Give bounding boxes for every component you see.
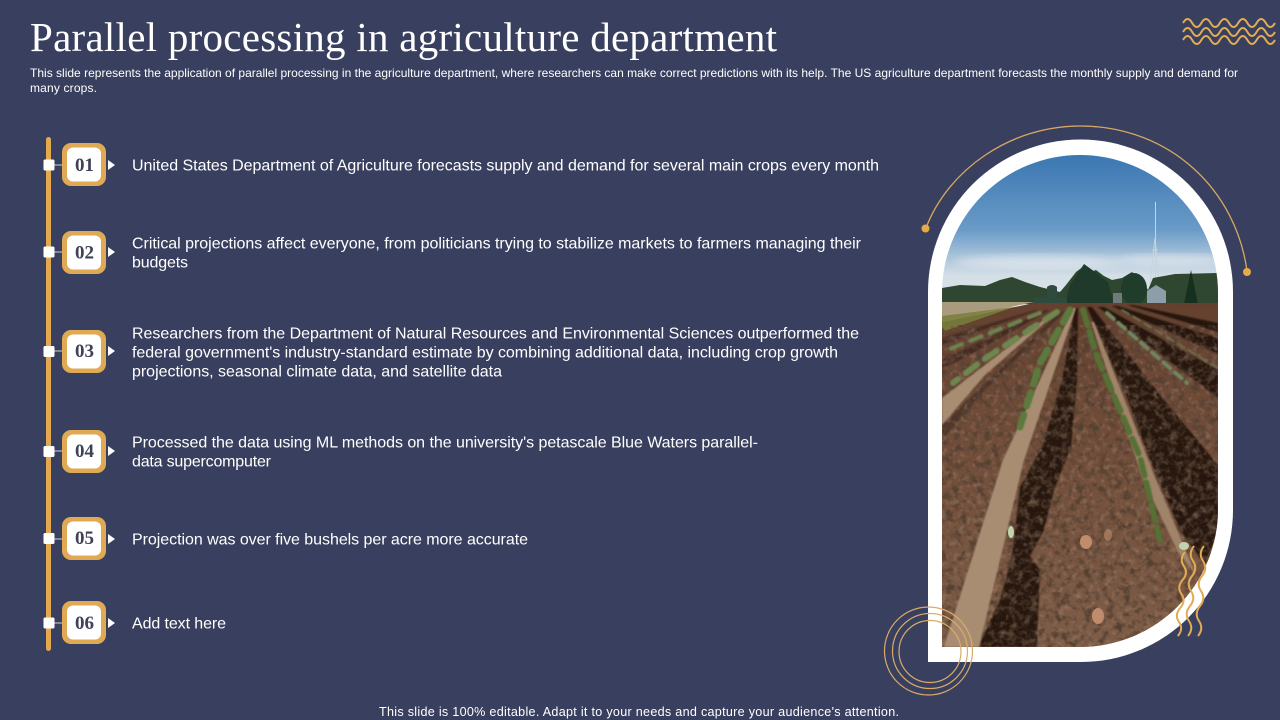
step 01 [44,143,879,186]
tower [1150,202,1159,284]
step 05: Projection was over five bushels per acre more accurate [132,532,528,548]
step 06: Add text here [132,616,226,632]
icon: concentric circles [884,607,972,695]
step 02 [44,231,862,274]
description text [30,66,1238,95]
footer note: This slide is 100% editable. Adapt it to your needs and capture your audience's attention. [379,705,899,719]
step 01: 01 [75,155,94,176]
step 04: Processed the data using ML methods on the university's petascale Blue Waters parallel- [132,434,758,452]
soil [942,303,1218,647]
green strip left [942,307,1014,332]
step 04 [44,430,758,473]
step 06: 06 [75,613,94,634]
step 04: data supercomputer [132,454,272,470]
step 03: projections, seasonal climate data, and satellite data [132,364,502,380]
step 02: Critical projections affect everyone, from politicians trying to stabilize markets to farmers managing their [132,236,862,252]
step 02: budgets [132,254,188,272]
white arch frame [928,140,1233,662]
step 05: 05 [75,528,94,549]
description text: many crops. [30,81,97,95]
pale leaves [1008,526,1189,550]
step 02: 02 [75,242,94,264]
shed [1113,293,1122,303]
step 03: federal government's industry-standard estimate by combining additional data, including crop growth [132,344,838,362]
timeline bar [46,137,51,651]
soil grain [942,325,1218,650]
potatoes [1080,529,1112,624]
step 06 [44,601,226,644]
step 01: United States Department of Agriculture forecasts supply and demand for several main crops every month [132,158,879,174]
step 03: Researchers from the Department of Natural Resources and Environmental Sciences outperformed the [132,326,859,342]
arc with end dots [922,126,1251,276]
tractor [1033,285,1067,304]
step 03: 03 [75,341,94,362]
left pale field [942,302,1034,322]
icon: wavy lines top right [1183,19,1275,44]
barn [1147,285,1166,303]
step 04: 04 [75,441,94,462]
tan paths [942,308,1196,647]
title: Parallel processing in agriculture department [30,14,778,60]
step 03 [44,326,859,380]
photo: farm field [942,155,1225,650]
clouds [955,254,1225,269]
tree line [942,264,1218,305]
icon: vertical wavy lines [1177,546,1205,636]
dark furrows [942,305,1218,647]
step 05 [44,517,528,560]
sky [942,155,1218,305]
description text: This slide represents the application of parallel processing in the agriculture department, where researchers can make correct predictions with its help. The US agriculture department forecasts the monthly supply and demand for [30,66,1238,80]
green crop rows [947,310,1218,540]
